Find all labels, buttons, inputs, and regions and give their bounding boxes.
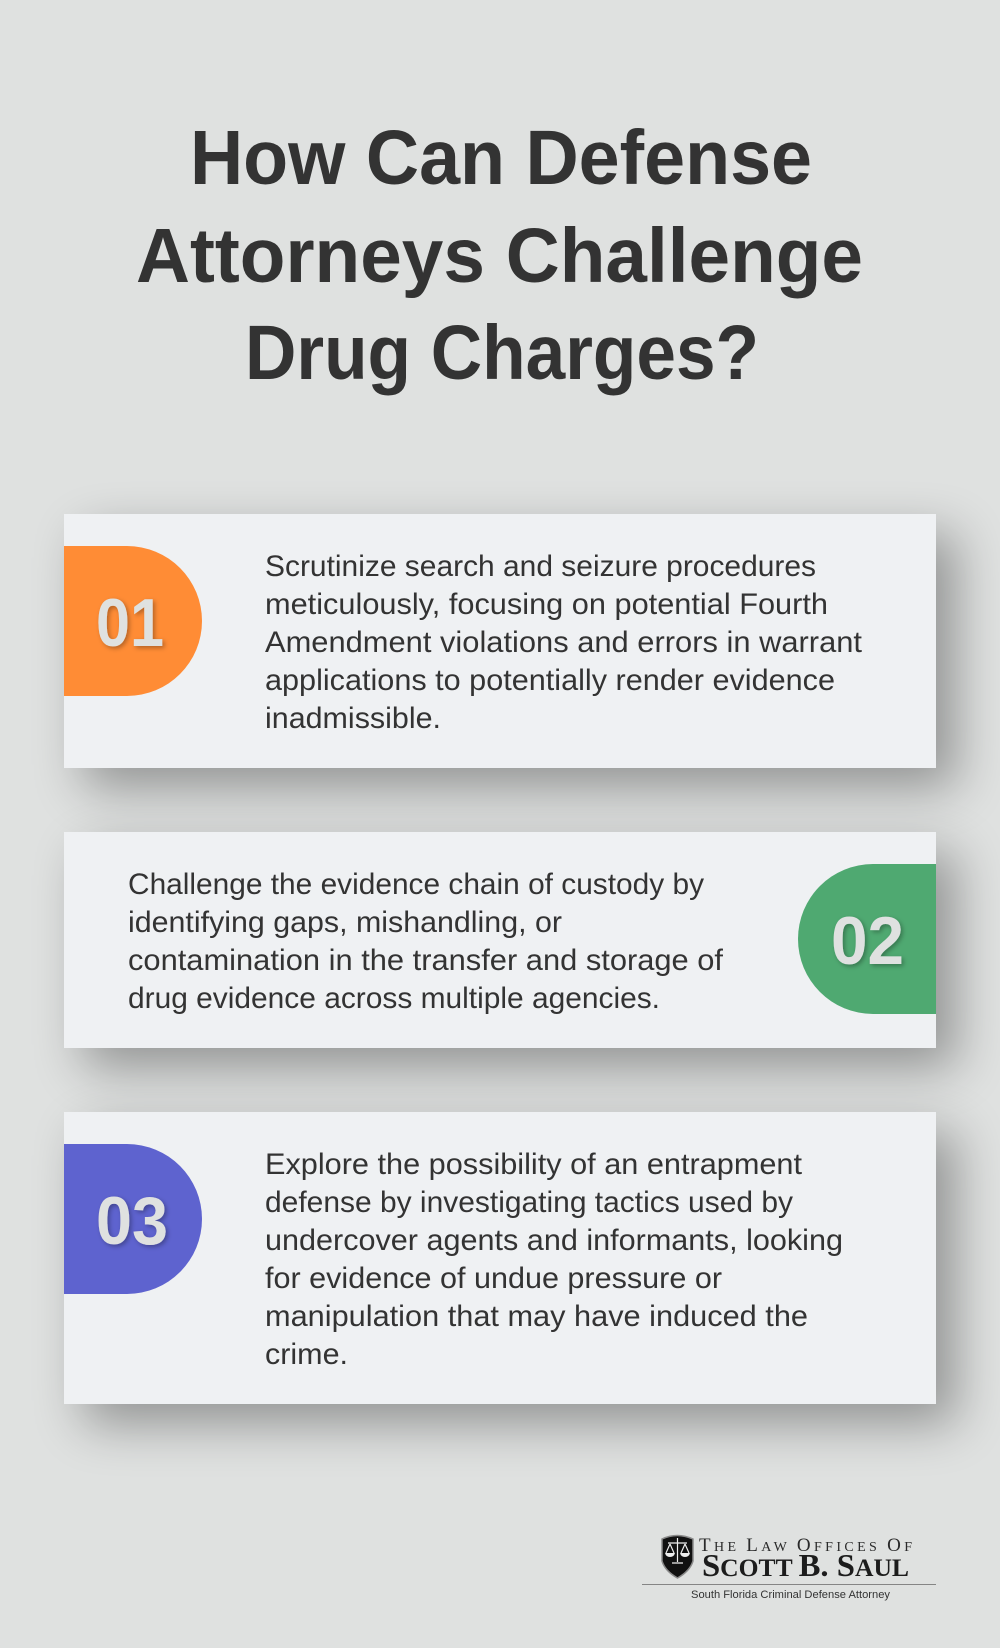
text: step 01 description xyxy=(265,550,863,735)
title xyxy=(136,115,863,396)
text: step 03 description: defense by investigating tactics used by xyxy=(265,1186,793,1219)
badge: 03 xyxy=(64,1144,202,1294)
badge: 03: 03 xyxy=(96,1183,168,1259)
logo: law offices xyxy=(642,1535,936,1601)
text: step 02 description: contamination in the transfer and storage of xyxy=(128,944,724,977)
text: step 03 description: undercover agents and informants, looking xyxy=(265,1224,843,1257)
text: step 01 description: Scrutinize search and seizure procedures xyxy=(265,550,816,583)
title: Drug Charges? xyxy=(245,310,759,396)
text: step 03 description xyxy=(265,1148,843,1371)
badge: 01 xyxy=(64,546,202,696)
panel: step 01 xyxy=(64,514,956,788)
text: step 03 description: for evidence of undue pressure or xyxy=(265,1262,722,1295)
text: step 02 description xyxy=(128,868,724,1015)
text: step 01 description: applications to potentially render evidence xyxy=(265,664,835,697)
text: step 03 description: Explore the possibility of an entrapment xyxy=(265,1148,803,1181)
badge: 02 xyxy=(798,864,936,1014)
text: step 02 description: identifying gaps, mishandling, or xyxy=(128,906,562,939)
logo text: scott b. saul: SCOTT B. SAUL xyxy=(702,1547,909,1583)
text: step 01 description: meticulously, focusing on potential Fourth xyxy=(265,588,828,621)
panel: step 02 xyxy=(64,832,956,1068)
text: step 01 description: Amendment violations and errors in warrant xyxy=(265,626,863,659)
text: step 01 description: inadmissible. xyxy=(265,702,441,735)
logo text: the law offices of: THE LAW OFFICES OF xyxy=(699,1535,912,1556)
text: step 03 description: crime. xyxy=(265,1338,348,1371)
panel: step 03 xyxy=(64,1112,956,1424)
text: step 02 description: drug evidence across multiple agencies. xyxy=(128,982,660,1015)
text: step 02 description: Challenge the evidence chain of custody by xyxy=(128,868,704,901)
title: How Can Defense xyxy=(190,115,812,201)
badge: 01: 01 xyxy=(96,585,164,661)
title: Attorneys Challenge xyxy=(136,213,863,299)
icon: shield with scales xyxy=(662,1536,693,1578)
logo tagline: South Florida Criminal Defense Attorney xyxy=(691,1589,891,1601)
text: step 03 description: manipulation that may have induced the xyxy=(265,1300,808,1333)
badge: 02: 02 xyxy=(831,903,904,979)
